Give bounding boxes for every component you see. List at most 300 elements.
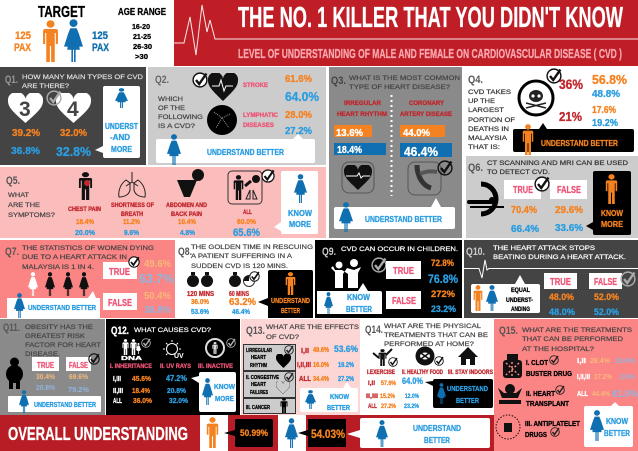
stats: 20.0% (75, 230, 96, 237)
callout: understand better: BETTER (456, 396, 479, 405)
question text: ARE THE (8, 202, 41, 209)
stats: 69.6% (69, 374, 89, 381)
question text: DUE TO A HEART ATTACK IN (22, 254, 127, 261)
treatment labels (367, 370, 493, 376)
question text: OF CVD? (266, 334, 299, 341)
callout: equal understanding: EQUAL (511, 287, 530, 294)
question text: PORTION OF (468, 117, 515, 124)
question text: ARE THERE? (22, 83, 69, 90)
panel: Q5 (0, 167, 326, 239)
stats: 4.8% (180, 230, 196, 237)
treatment labels: TRANSPLANT (526, 399, 569, 408)
treatment labels: II. HEART (526, 389, 555, 398)
option: true: TRUE (109, 267, 130, 278)
stats table: 15.2% (380, 393, 395, 400)
labels: STROKE (243, 82, 269, 89)
symptom labels: CHEST PAIN (68, 206, 101, 213)
stats (187, 291, 256, 316)
callout: understand and more: UNDERST (105, 121, 139, 131)
heart option 4: 4 (67, 98, 79, 121)
check mark (193, 73, 207, 87)
callout: know better: BETTER (327, 405, 350, 412)
icon: flat heartbeat line (464, 260, 638, 278)
cause labels: III. INACTIVE (198, 363, 234, 370)
callout: understand better: UNDERSTAND (271, 296, 310, 305)
stats: 18.4% (76, 219, 95, 226)
question text: CVD CAN OCCUR IN CHILDREN. (341, 246, 458, 253)
stats table: 16.0% (313, 362, 330, 369)
callout: understand better (7, 291, 100, 318)
callout: understand and more: -AND (110, 132, 130, 142)
male result (200, 415, 273, 451)
stat bars: 13.6% (336, 128, 363, 139)
option: false (589, 273, 622, 289)
check marks (550, 356, 564, 436)
panel: Q8 (178, 244, 313, 318)
stats: 28.0% (285, 110, 312, 121)
female result: 54.03% (311, 427, 345, 441)
treatment labels: DRUGS (525, 430, 547, 439)
stat bars: 18.4% (337, 145, 362, 156)
question text: DEATHS IN (468, 126, 509, 133)
panel: Q13 (241, 319, 360, 415)
callout: understand better: UNDERSTAND BETTER (541, 138, 618, 148)
question text: FOLLOWING (158, 114, 203, 121)
panel: Q10 (464, 240, 638, 318)
callout: know more: MORE (289, 219, 311, 229)
stats: 39.2% (12, 128, 40, 139)
male count: PAX (14, 42, 32, 54)
stats: 70.4% (511, 205, 537, 216)
icon: pill bottle (503, 354, 522, 378)
option: false: FALSE (594, 277, 617, 288)
stats: 79.2% (68, 387, 90, 394)
stats: 30.4% (36, 374, 56, 381)
check mark (372, 258, 386, 272)
age list: 21-25 (133, 32, 151, 41)
option labels: HEART RHYTHM (337, 111, 387, 118)
stat bars: 44.0% (403, 128, 430, 139)
icon: man (43, 20, 58, 62)
question label: Q6. (468, 162, 483, 174)
question label: Q9. (322, 246, 336, 258)
option: true (386, 261, 421, 279)
icon: lymphatic (207, 105, 237, 135)
stats table: ALL (113, 398, 122, 405)
question text: BEATING DURING A HEART ATTACK. (493, 254, 626, 261)
icon: women one in four (28, 272, 89, 296)
callout: understand better: UNDERSTAND BETTER (365, 214, 442, 224)
callout: know more: KNOW (214, 382, 236, 391)
question text: GREATEST RISK (25, 333, 86, 340)
callout: know more: MORE (215, 394, 234, 403)
stats: 52.0% (594, 307, 620, 318)
symptom labels: BACK PAIN (171, 211, 202, 218)
question text: OF THE (158, 105, 186, 112)
callout: know better (317, 283, 382, 314)
effect: cancer: III. CANCER (246, 405, 270, 411)
icon: heartbeat line (174, 5, 638, 55)
question text: THE GOLDEN TIME IN RESCUING (191, 244, 313, 251)
stats: 48.0% (549, 292, 575, 303)
check mark (47, 91, 61, 105)
panel: Q15 (494, 319, 638, 451)
stats: 9.6% (124, 230, 140, 237)
stats: 65.6% (233, 227, 260, 239)
male count: 125 (15, 30, 31, 42)
stats table: I,II (577, 358, 586, 365)
stats: 29.6% (555, 205, 583, 216)
stats: 50.4% (144, 291, 171, 302)
option labels (337, 100, 453, 118)
age list: 16-20 (132, 22, 150, 31)
option: true (544, 273, 577, 289)
question label: Q4. (468, 74, 483, 86)
callout: understand better: UNDERSTAND (447, 384, 488, 393)
treatment labels: BUSTER DRUG (526, 369, 572, 378)
stats table: 34.4% (313, 376, 330, 383)
question text: TREATMENTS THAT CAN BE (384, 332, 489, 339)
callout: know better: KNOW (606, 417, 628, 426)
effect: congestive heart failures: FAILURES (250, 390, 268, 396)
stats table: ALL (577, 391, 589, 398)
female result (278, 415, 346, 451)
question text: SUDDEN CVD IS 120 MINS. (191, 263, 288, 270)
question text: WHAT IS THE MOST COMMON (349, 75, 460, 82)
callout: understand better (513, 123, 634, 155)
option labels: CORONARY (409, 100, 445, 107)
stats: 10.4% (178, 219, 197, 226)
icon: woman (64, 19, 83, 62)
check mark (262, 170, 274, 182)
icon: clocks (187, 272, 254, 287)
effect: irregular heart rhythm: RHYTHM (250, 363, 267, 369)
question text: FACTOR FOR HEART (25, 342, 101, 349)
effect: irregular heart rhythm: I.IRREGULAR (246, 348, 272, 354)
treatment labels: I.EXERCISE (367, 370, 395, 376)
option: true (504, 180, 541, 199)
option: false (103, 293, 137, 310)
icon: exercise (373, 349, 392, 366)
question label: Q10. (466, 246, 485, 258)
female count: PAX (92, 42, 110, 54)
stats: 36.8% (144, 305, 171, 316)
question text: TYPE OF HEART DISEASE? (349, 84, 450, 91)
question label: Q11. (3, 322, 20, 334)
treatment labels: I. CLOT (526, 358, 548, 367)
question text: UP THE (468, 98, 496, 105)
stats table: I,III (113, 376, 121, 383)
stats: 19.2% (592, 118, 618, 129)
stats: 36.0% (191, 299, 210, 306)
symptom labels: ABDOMEN AND (166, 202, 207, 209)
icon: skull (519, 81, 553, 115)
stats: 36% (559, 76, 583, 92)
question text: WHAT ARE THE EFFECTS (266, 324, 360, 331)
stats table: II,III (113, 388, 123, 395)
callout: understand better: BETTER (424, 435, 450, 445)
stats: 64.0% (285, 89, 319, 104)
icon: obese person (6, 358, 23, 389)
heading: age range: AGE RANGE (118, 7, 166, 18)
question text: A PATIENT SUFFERING IN A (191, 253, 293, 260)
question text: SYMPTOMS? (8, 212, 55, 219)
callout: equal understanding: UNDERST- (506, 297, 533, 304)
question text: WHAT ARE THE TREATMENTS (522, 327, 633, 334)
callout: know better: BETTER (346, 305, 372, 314)
question label: Q8. (178, 246, 192, 258)
callout: know more (586, 171, 631, 235)
stats: 32.8% (56, 144, 91, 159)
check mark (89, 354, 99, 364)
icon: sun: UV (174, 353, 184, 360)
option: true (103, 262, 137, 279)
icon: scanner (467, 184, 504, 214)
callout: know better: BETTER (604, 429, 630, 438)
question text: TO DETECT CVD. (487, 169, 550, 176)
callout: understand better: UNDERSTAND (413, 423, 461, 433)
symptom labels: BREATH (121, 211, 143, 218)
question text: MALAYSIA (468, 135, 508, 142)
stats table (366, 376, 423, 410)
stats table: I,II (368, 380, 375, 387)
panel: Q6 (466, 156, 638, 238)
callout: understand better (334, 198, 455, 232)
question label: Q15. (499, 325, 518, 337)
question text: THAT CAN BE PERFORMED (522, 336, 623, 343)
stats table: 27.2% (381, 403, 396, 410)
female count: 125 (92, 30, 108, 42)
stats table (577, 358, 638, 400)
age list: >30 (135, 52, 148, 61)
icon: irregular heart (342, 162, 374, 193)
stats (11, 128, 91, 159)
effect: congestive heart failures: II. CONGESTIVE (246, 375, 279, 381)
check mark (547, 69, 561, 83)
option: true: TRUE (37, 360, 54, 370)
option: false (386, 291, 421, 309)
question text: CVD TAKES (468, 89, 512, 96)
stats table: I,II,III (297, 362, 311, 369)
panel: overall understanding (0, 415, 494, 451)
icon: all symptoms (228, 171, 262, 204)
panel: Q11 (0, 319, 105, 415)
stats table (113, 374, 189, 405)
option: false: FALSE (108, 298, 132, 309)
stats: 11.2% (123, 219, 141, 226)
stats: 52.0% (594, 292, 620, 303)
stats table: 45.6% (132, 376, 152, 383)
callout: equal understanding: ANDING (511, 306, 530, 313)
callout: understand better (425, 379, 493, 408)
age list: 26-30 (133, 42, 152, 51)
question text: DISEASE. (25, 351, 60, 358)
stats table: 47.2% (166, 374, 187, 383)
panel: Q4 (468, 69, 634, 155)
callout: know more: KNOW (601, 208, 624, 218)
callout: understand better: UNDERSTAND BETTER (207, 147, 284, 157)
icon: healthy food (416, 346, 434, 366)
question text: MALAYSIA IS 1 IN 4. (22, 264, 94, 271)
callout: understand better: UNDERSTAND BETTER (28, 303, 96, 312)
panel: Q2 (148, 67, 326, 165)
stats table: 57.6% (381, 380, 396, 387)
stats (139, 259, 174, 316)
icon: family: DNA (121, 356, 143, 362)
panel: Q1 (0, 67, 146, 165)
stats table: 18.4% (132, 388, 151, 395)
check mark (535, 177, 549, 191)
check marks (142, 339, 235, 347)
panel: Q12 (106, 319, 240, 415)
question text: HOW MANY MAIN TYPES OF CVD (22, 74, 143, 81)
effect: congestive heart failures: HEART (251, 382, 266, 388)
icon: lungs (119, 172, 145, 197)
option: false: FALSE (557, 185, 581, 196)
icon: doctor (498, 384, 522, 404)
stats: 66.4% (511, 224, 539, 235)
panel: Q14 (365, 323, 493, 410)
stats table: 19.2% (338, 362, 355, 369)
cause labels (110, 363, 234, 370)
stats (511, 205, 583, 235)
check mark (129, 257, 139, 267)
callout: understand better: UNDERSTAND BETTER (34, 400, 96, 409)
stats (36, 374, 90, 394)
stats: 61.6% (285, 74, 312, 85)
question text: WHICH (158, 96, 183, 103)
heading: OVERALL UNDERSTANDING (8, 424, 188, 444)
symptom labels: SHORTNESS OF (111, 202, 154, 209)
question label: Q13. (246, 325, 265, 337)
question label: Q3. (331, 75, 346, 87)
stats table: 36.0% (133, 398, 153, 405)
callout: know better (584, 402, 633, 447)
option: false: FALSE (69, 360, 88, 370)
stats: 76.8% (428, 272, 458, 286)
option labels: ARTERY DISEASE (400, 111, 453, 118)
option: true: TRUE (513, 185, 533, 196)
stats: 56.8% (592, 72, 627, 87)
stats table: 18.4% (615, 358, 636, 365)
stats: 36.8% (11, 146, 40, 157)
stats: 63.2% (229, 297, 256, 308)
question text: OBESITY HAS THE (25, 324, 94, 331)
icon: antiplatelet pill (496, 415, 520, 439)
stats: 21% (559, 109, 582, 124)
question text: WHAT (8, 192, 29, 199)
question label: Q5. (6, 175, 20, 187)
stats: 53.6% (191, 309, 210, 316)
stats: 20.8% (36, 385, 56, 392)
stats: 49.6% (144, 259, 171, 270)
option: true: TRUE (393, 266, 414, 277)
male result: 50.99% (240, 428, 268, 438)
stats (559, 72, 627, 129)
question text: THE STATISTICS OF WOMEN DYING (22, 245, 154, 252)
callout: know better: KNOW (330, 394, 349, 401)
callout: understand better: BETTER (281, 306, 300, 315)
stats table: ALL (368, 403, 377, 410)
cause labels: II. UV RAYS (160, 363, 192, 370)
question text: IS A CVD? (158, 123, 195, 130)
stats table: ALL (299, 376, 312, 383)
icon: abdomen pain (177, 169, 204, 197)
stats: 23.2% (431, 304, 456, 314)
symptom labels (68, 202, 252, 218)
icon: children (331, 259, 361, 288)
callout: know more: MORE (601, 219, 623, 229)
callout: know more: KNOW (288, 208, 313, 218)
question label: Q12. (111, 325, 129, 337)
check mark (438, 161, 452, 175)
check marks (389, 357, 443, 366)
question text: AT THE HOSPITAL? (522, 346, 594, 353)
stats: 33.6% (555, 223, 583, 234)
panel: Q9 (315, 240, 462, 318)
stats table: I,II,III (577, 374, 590, 381)
stats: 46.4% (232, 309, 251, 316)
callout: understand and more: MORE (111, 144, 132, 154)
panel: Q3 (329, 67, 462, 238)
stats (285, 74, 319, 137)
callout: understand better (156, 134, 315, 165)
labels: LYMPHATIC (243, 112, 278, 119)
callout: understand and more (95, 86, 140, 158)
icon: house (458, 347, 478, 365)
callout: understand better (347, 418, 490, 448)
stats table: 27.2% (594, 374, 613, 381)
stats table: 53.6% (334, 344, 358, 354)
question text: WHAT CAUSES CVD? (134, 327, 211, 334)
stats: 27.2% (285, 126, 312, 137)
stats: 60.0% (237, 219, 257, 226)
check mark (621, 272, 635, 286)
cause labels: I. INHERITANCE (110, 363, 153, 370)
heart option 3: 3 (19, 98, 31, 121)
labels (243, 82, 278, 129)
option labels: IRREGULAR (344, 100, 381, 107)
stats table (297, 344, 358, 383)
effect: congestive heart failures (244, 372, 296, 398)
labels: DISEASES (243, 122, 275, 129)
question text: PERFORMED AT HOME? (384, 341, 474, 348)
option: false (550, 180, 587, 199)
stats: 120 MINS (187, 291, 214, 298)
question label: Q14. (365, 324, 383, 336)
question label: Q7. (5, 246, 19, 258)
callout: know more (191, 372, 236, 412)
stats: 72.8% (431, 258, 454, 268)
stats table: 27.2% (338, 376, 355, 383)
stats (75, 219, 260, 239)
treatment labels (525, 358, 580, 439)
stat bars (334, 125, 452, 159)
stats: 17.6% (592, 105, 616, 116)
icon: coronary artery (408, 162, 441, 195)
icon: chest pain (79, 172, 92, 200)
question label: Q2. (155, 74, 169, 86)
stat bars: 46.4% (404, 144, 438, 159)
question text: THE HEART ATTACK STOPS (493, 245, 596, 252)
question text: CT SCANNING AND MRI CAN BE USED (487, 160, 628, 167)
option: true: TRUE (550, 277, 571, 288)
stats: 32.0% (60, 128, 87, 139)
heart option 4 (56, 92, 91, 123)
icon: heart (208, 72, 238, 101)
effect: irregular heart rhythm: HEART (251, 355, 266, 361)
heart option 3 (8, 92, 43, 123)
